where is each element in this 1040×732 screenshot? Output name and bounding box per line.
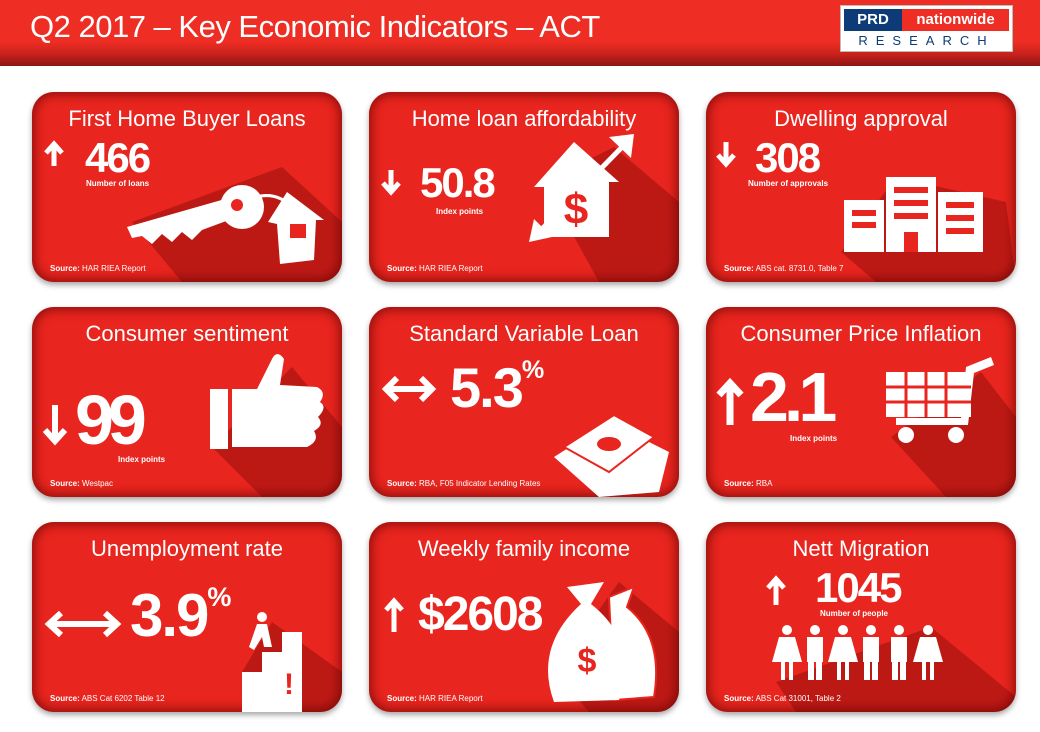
panel: nett migration: Number of people [820,609,888,618]
value: 308 [755,134,819,181]
panel: consumer price inflation: Index points [790,434,837,443]
value: 5.3% [450,356,544,419]
heading: Weekly family income [418,536,630,561]
value: 50.8 [420,159,494,206]
source: Source: RBA, F05 Indicator Lending Rates [387,479,540,488]
source: Source: ABS cat. 8731.0, Table 7 [724,264,844,273]
panel: dwelling approval: Number of approvals [748,179,828,188]
header bar [0,0,1040,66]
heading: Nett Migration [793,536,929,561]
panel: consumer price inflation [706,307,1016,497]
heading: Consumer Price Inflation [741,321,981,346]
panel: consumer sentiment: Index points [118,455,165,464]
arrow up [46,144,62,166]
panel: unemployment rate [32,522,342,712]
source: Source: HAR RIEA Report [387,694,483,703]
panel: home loan affordability [369,92,679,282]
heading: Home loan affordability [412,106,636,131]
logo: PRD [857,11,889,28]
heading: Unemployment rate [91,536,283,561]
logo: RESEARCH [858,33,995,48]
arrow down [383,170,399,192]
source: Source: HAR RIEA Report [50,264,146,273]
value: 1045 [815,564,900,611]
panel: home loan affordability: Index points [436,207,483,216]
heading: Consumer sentiment [86,321,288,346]
value: $2608 [418,588,541,641]
panel: consumer sentiment [32,307,342,497]
panel: unemployment rate: ! [284,668,294,701]
value: 3.9% [130,582,231,649]
title: Q2 2017 – Key Economic Indicators – ACT [30,9,600,44]
panel: nett migration [706,522,1016,712]
arrow down [718,142,734,164]
panel: standard variable loan [369,307,679,497]
value: 2.1 [750,358,832,436]
value: 466 [85,134,149,181]
arrow up [768,579,784,605]
panel: first home buyer loans [32,92,342,282]
logo: nationwide [916,11,995,28]
value: 99 [75,381,141,459]
heading: Standard Variable Loan [409,321,639,346]
arrow both [49,613,117,635]
logo [840,5,1013,52]
source: Source: Westpac [50,479,113,488]
arrow down [45,405,65,441]
source: Source: HAR RIEA Report [387,264,483,273]
panel: weekly family income: $ [578,642,597,680]
heading: Dwelling approval [774,106,948,131]
arrow up [386,601,402,632]
source: Source: ABS Cat 6202 Table 12 [50,694,165,703]
source: Source: RBA [724,479,772,488]
panel: first home buyer loans: Number of loans [86,179,149,188]
panel: dwelling approval [706,92,1016,282]
panel: weekly family income [369,522,679,712]
arrow both [386,378,432,400]
source: Source: ABS Cat 31001, Table 2 [724,694,841,703]
panel: home loan affordability: $ [564,185,588,234]
arrow up [719,383,741,425]
heading: First Home Buyer Loans [68,106,306,131]
